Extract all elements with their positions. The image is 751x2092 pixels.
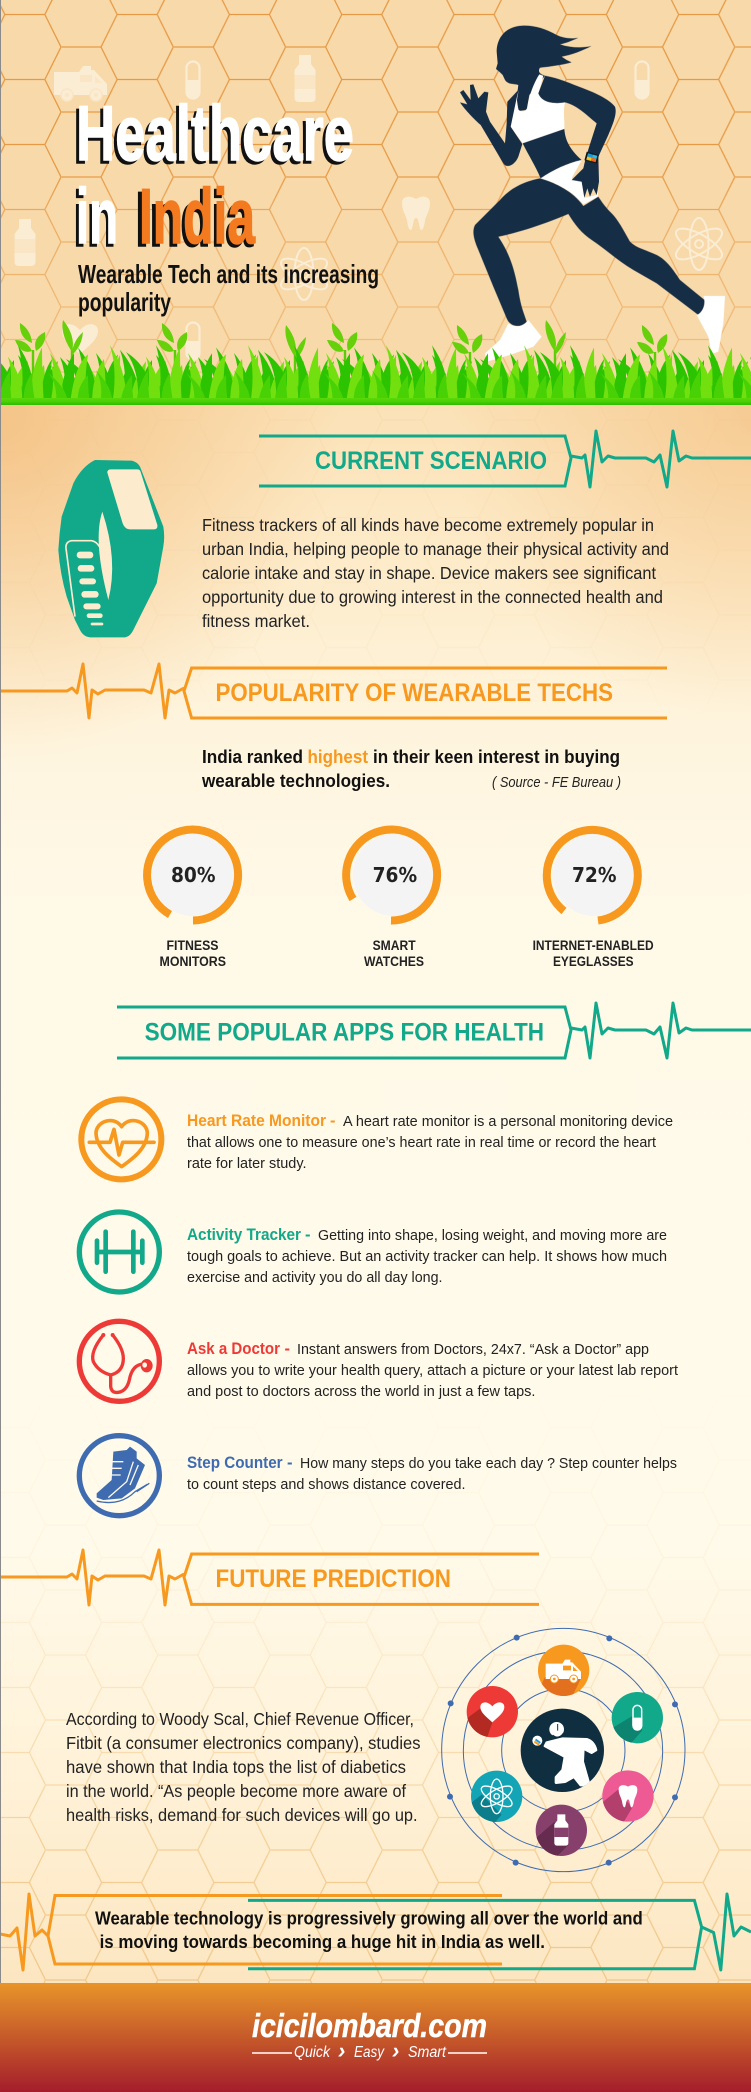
stat: internet-enabled eyeglasses 72%: 72%	[572, 863, 616, 887]
title: Healthcare in India: in	[73, 175, 116, 263]
diagram: orbit of health icons	[442, 1628, 685, 1872]
callout: closing statement	[0, 1894, 751, 1970]
app: activity tracker: -	[305, 1226, 310, 1244]
stat: fitness monitors 80%: FITNESS	[166, 938, 218, 953]
stat: fitness monitors 80%: MONITORS	[160, 954, 226, 969]
text block: Woody Scal quote: According to Woody Scal, Chief Revenue Officer,	[66, 1709, 414, 1729]
heading: popularity	[0, 664, 667, 718]
app: step counter: How many steps do you take each day ? Step counter helps	[300, 1455, 677, 1472]
icon: heart rate	[81, 1099, 161, 1179]
panel: popularity of wearable techs	[0, 664, 667, 969]
text block: Woody Scal quote: have shown that India tops the list of diabetics	[66, 1757, 406, 1777]
app: ask a doctor: Instant answers from Doctors, 24x7. “Ask a Doctor” app	[297, 1341, 649, 1358]
text block: Woody Scal quote: in the world. “As people become more aware of	[66, 1781, 406, 1801]
tagline: Quick Easy Smart: Smart	[408, 2044, 446, 2061]
panel: future prediction	[0, 1550, 685, 1872]
icon: stethoscope	[79, 1321, 159, 1401]
orbit dots	[447, 1635, 678, 1866]
stat: smart watches 76%	[346, 830, 437, 969]
runner silhouette	[460, 26, 725, 362]
title: Healthcare in India: India	[139, 172, 255, 260]
app: step counter: to count steps and shows distance covered.	[187, 1476, 466, 1493]
app: heart rate monitor: that allows one to measure one’s heart rate in real time or record the heart	[187, 1134, 657, 1151]
title: Healthcare in India: Healthcare	[76, 89, 354, 177]
stat: smart watches 76%: WATCHES	[364, 954, 424, 969]
icon: bottle badge	[536, 1804, 587, 1856]
app: activity tracker: exercise and activity you do all day long.	[187, 1269, 442, 1286]
icon: central runner	[521, 1709, 604, 1792]
icon: running shoe	[79, 1436, 159, 1516]
stat: fitness monitors 80%	[147, 830, 238, 969]
text block: scenario paragraph	[202, 515, 669, 631]
app: ask a doctor: -	[284, 1340, 290, 1358]
icon: pill badge	[612, 1692, 663, 1744]
text block: India ranked highest: highest	[308, 746, 368, 767]
app: step counter: Step Counter	[187, 1454, 283, 1472]
text block: India ranked highest: in their keen interest in buying	[373, 746, 620, 767]
app: activity tracker: Activity Tracker	[187, 1226, 302, 1244]
ghost health icons	[14, 55, 726, 360]
app: heart rate monitor: -	[330, 1112, 336, 1130]
stat: smart watches 76%: 76%	[373, 863, 417, 887]
grass	[0, 320, 751, 405]
title: Healthcare in India: in	[76, 172, 118, 260]
tagline: Quick Easy Smart: ›	[392, 2038, 399, 2063]
icon: tooth badge	[602, 1770, 654, 1822]
text block: Woody Scal quote	[66, 1709, 421, 1825]
tagline: Quick Easy Smart: Quick	[294, 2044, 331, 2061]
app: step counter	[79, 1436, 677, 1516]
callout: closing statement: is moving towards becoming a huge hit in India as well.	[100, 1932, 545, 1952]
tagline: Quick Easy Smart: Easy	[354, 2044, 385, 2061]
app: ask a doctor: allows you to write your health query, attach a picture or your latest lab report	[187, 1362, 679, 1379]
page background	[0, 405, 751, 1983]
callout: closing statement: Wearable technology is progressively growing all over the world and	[95, 1908, 643, 1928]
app: heart rate monitor: Heart Rate Monitor	[187, 1112, 327, 1130]
heading: future prediction: FUTURE PREDICTION	[216, 1565, 451, 1593]
heading: future prediction	[0, 1550, 539, 1605]
text block: scenario paragraph: fitness market.	[202, 611, 310, 631]
text block: India ranked highest: wearable technologies.	[201, 770, 390, 791]
icon: atom badge	[471, 1770, 522, 1822]
stat: internet-enabled eyeglasses 72%	[533, 830, 654, 969]
stat: internet-enabled eyeglasses 72%: INTERNET-ENABLED	[533, 938, 654, 953]
title: Healthcare in India: India	[135, 175, 253, 263]
footer	[0, 1983, 751, 2092]
text block: India ranked highest	[201, 746, 620, 791]
heading: apps	[117, 1003, 751, 1058]
text block: scenario paragraph: calorie intake and stay in shape. Device makers see significant	[202, 563, 656, 583]
text block: scenario paragraph: Fitness trackers of all kinds have become extremely popular in	[202, 515, 654, 535]
heading: apps: SOME POPULAR APPS FOR HEALTH	[145, 1019, 544, 1047]
app: activity tracker	[79, 1212, 667, 1292]
app: heart rate monitor	[81, 1099, 673, 1179]
text block: Woody Scal quote: health risks, demand for such devices will go up.	[66, 1805, 418, 1825]
app: heart rate monitor: rate for later study.	[187, 1155, 306, 1172]
subtitle: Wearable Tech and its increasing	[78, 259, 379, 289]
logo: icicilombard.com: icicilombard.com	[252, 2007, 487, 2044]
title: Healthcare in India: Healthcare	[73, 92, 351, 180]
stat: smart watches 76%: SMART	[373, 938, 416, 953]
panel: current scenario	[58, 431, 751, 637]
icon: heart badge	[466, 1686, 518, 1738]
heading: popularity: POPULARITY OF WEARABLE TECHS	[216, 679, 613, 707]
text block: Woody Scal quote: Fitbit (a consumer electronics company), studies	[66, 1733, 421, 1753]
app: activity tracker: Getting into shape, losing weight, and moving more are	[318, 1227, 667, 1244]
app: ask a doctor	[79, 1321, 679, 1401]
source note: ( Source - FE Bureau )	[492, 775, 621, 791]
icon: ambulance badge	[538, 1645, 589, 1700]
tagline: Quick Easy Smart: ›	[338, 2038, 345, 2063]
icon: dumbbell	[79, 1212, 159, 1292]
subtitle: popularity	[78, 287, 171, 317]
stat: internet-enabled eyeglasses 72%: EYEGLASSES	[553, 954, 634, 969]
panel: popular apps for health	[79, 1003, 751, 1516]
title: Healthcare in India	[73, 89, 354, 263]
app: heart rate monitor: A heart rate monitor is a personal monitoring device	[343, 1113, 673, 1130]
orbit rings	[442, 1628, 685, 1872]
heading: current scenario	[259, 431, 751, 487]
text block: India ranked highest: India ranked	[202, 746, 303, 767]
icon: fitness band	[58, 460, 164, 637]
app: step counter: -	[287, 1454, 292, 1472]
text block: scenario paragraph: urban India, helping people to manage their physical activity and	[202, 539, 669, 559]
panel: hero header	[0, 0, 751, 405]
subtitle	[78, 259, 379, 317]
app: ask a doctor: and post to doctors across the world in just a few taps.	[187, 1383, 535, 1400]
stat: fitness monitors 80%: 80%	[171, 863, 216, 887]
text block: scenario paragraph: opportunity due to growing interest in the connected health and	[202, 587, 663, 607]
heading: current scenario: CURRENT SCENARIO	[315, 447, 547, 475]
app: activity tracker: tough goals to achieve. But an activity tracker can help. It shows how much	[187, 1248, 667, 1265]
tagline: Quick Easy Smart	[252, 2038, 487, 2063]
app: ask a doctor: Ask a Doctor	[187, 1340, 281, 1358]
